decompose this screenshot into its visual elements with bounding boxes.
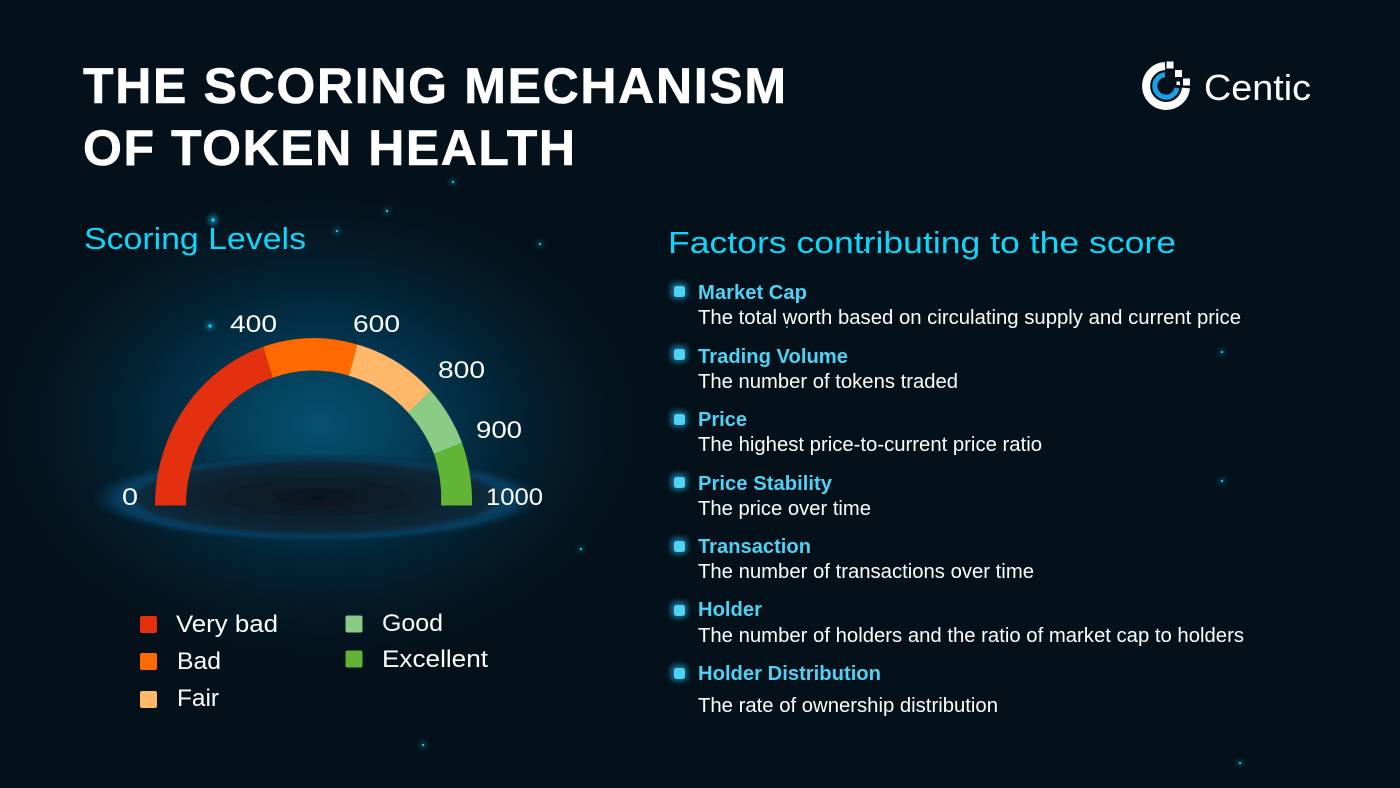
legend item: good: Good: [382, 610, 443, 637]
legend item: good: [346, 610, 443, 637]
gauge labels: 600: [353, 311, 400, 338]
gauge labels: 0: [122, 484, 138, 511]
factor: holder distribution: Holder Distribution: [698, 663, 881, 685]
background stars: [208, 89, 1241, 764]
heading: scoring levels: Scoring Levels: [84, 221, 306, 256]
stage ring: [94, 454, 540, 542]
logo: Centic: [1146, 62, 1311, 108]
heading: factors: Factors contributing to the score: [668, 225, 1176, 260]
factor: trading volume: The number of tokens traded: [698, 371, 958, 393]
legend item: bad: Bad: [177, 648, 221, 675]
legend item: excellent: Excellent: [382, 646, 488, 673]
gauge: [155, 338, 472, 506]
factor: holder distribution: [671, 663, 998, 717]
factor: price stability: The price over time: [698, 498, 871, 520]
gauge labels: 400: [230, 311, 277, 338]
factor: market cap: The total worth based on circulating supply and current price: [698, 307, 1241, 329]
factor: transaction: Transaction: [698, 536, 811, 558]
star halos: [207, 180, 1242, 765]
legend item: excellent: [346, 646, 488, 673]
factor: market cap: [671, 282, 1241, 329]
factor: holder: [671, 599, 1244, 647]
factor: price stability: Price Stability: [698, 473, 833, 495]
factors list: [671, 282, 1244, 717]
factor: transaction: [671, 536, 1034, 583]
gauge labels: 900: [476, 417, 522, 444]
factor: market cap: Market Cap: [698, 282, 807, 304]
background glow: [0, 190, 640, 660]
factor: trading volume: Trading Volume: [698, 346, 848, 368]
segment: excellent: [434, 443, 472, 506]
legend item: fair: Fair: [177, 685, 219, 712]
gauge labels: 800: [438, 357, 485, 384]
segment: fair: [349, 344, 431, 413]
legend item: very bad: [140, 611, 278, 638]
factor: price stability: [671, 473, 871, 520]
factor: holder distribution: The rate of ownership distribution: [698, 695, 998, 717]
legend: [140, 610, 488, 712]
factor: transaction: The number of transactions over time: [698, 561, 1034, 583]
factor: holder: Holder: [698, 599, 762, 621]
title: OF TOKEN HEALTH: [83, 120, 575, 176]
segment: bad: [263, 338, 357, 378]
segment: good: [408, 391, 462, 454]
factor: holder: The number of holders and the ratio of market cap to holders: [698, 625, 1244, 647]
title: [83, 58, 786, 176]
factor: price: Price: [698, 409, 747, 431]
title: THE SCORING MECHANISM: [83, 58, 786, 114]
segment: very bad: [155, 347, 273, 506]
legend item: bad: [140, 648, 221, 675]
gauge labels: [122, 311, 543, 511]
legend item: fair: [140, 685, 219, 712]
logo wordmark: Centic: [1204, 67, 1311, 108]
gauge labels: 1000: [486, 484, 543, 511]
factor: trading volume: [671, 346, 958, 393]
icon: logo mark: [1146, 62, 1190, 106]
factor: price: The highest price-to-current price ratio: [698, 434, 1042, 456]
legend item: very bad: Very bad: [176, 611, 278, 638]
factor: price: [671, 409, 1042, 456]
